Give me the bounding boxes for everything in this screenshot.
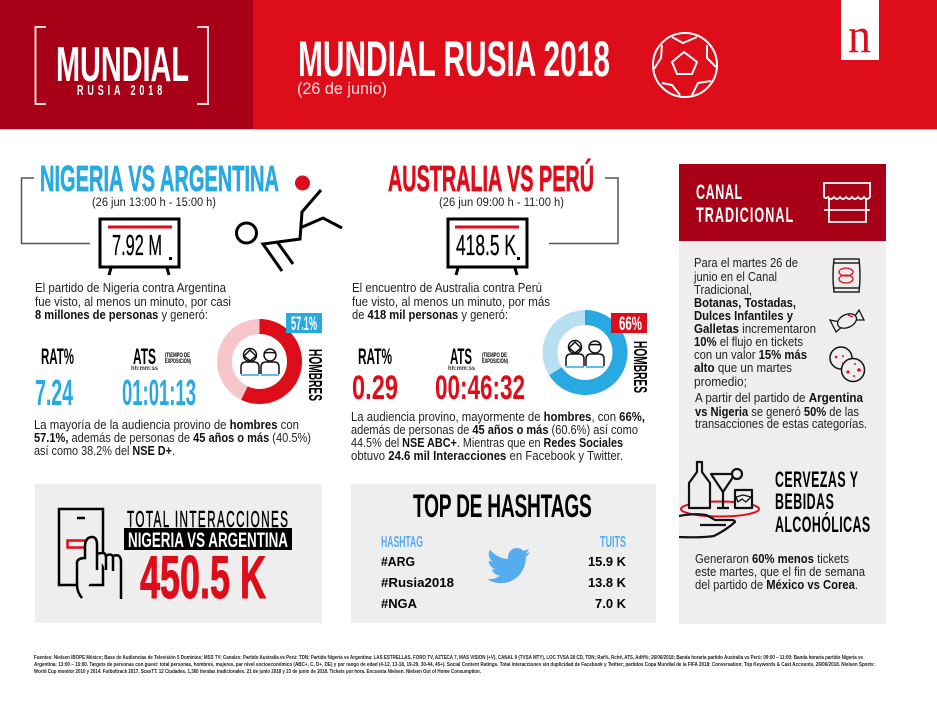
header band [0, 0, 937, 130]
panel header: TRADICIONAL [696, 203, 794, 227]
label: hombres: HOMBRES [305, 349, 325, 401]
icon: candy [830, 310, 864, 332]
table: hashtags: 7.0 K [595, 596, 627, 611]
match schedule: (26 jun 09:00 h - 11:00 h) [439, 197, 564, 209]
stat: ATS: EXPOSICIÓN) [165, 357, 191, 365]
icon: snack bag [833, 259, 860, 292]
panel: canal tradicional [679, 164, 886, 624]
donut chart: 66% hombres [550, 313, 650, 393]
connector line [549, 178, 618, 244]
heading: top de hashtags: TOP DE HASHTAGS [413, 488, 592, 524]
icon: twitter bird [487, 548, 530, 583]
badge: 66%: 66% [619, 314, 642, 335]
icon: tv with audience [448, 219, 527, 275]
intro text: de 418 mil personas y generó: [352, 308, 508, 322]
label: Nigeria vs Argentina: NIGERIA VS ARGENTINA [128, 529, 288, 552]
audience text: así como 38.2% del NSE D+. [34, 444, 175, 458]
icon: tv with audience: 418.5 K [456, 230, 516, 262]
text: botanas y dulces [693, 256, 867, 431]
audience text: 44.5% del NSE ABC+. Mientras que en Redes Sociales [351, 436, 623, 450]
table: hashtags: 15.9 K [588, 554, 627, 569]
stat: ATS: EXPOSICIÓN) [482, 357, 508, 365]
text: bebidas [695, 552, 865, 592]
footnote: sources: World Cup monitor 2010 y 2014. Futboltrack 2017. ScanTT. 12 Ciudades, 1,360 tiendas tradicionales. 21 de junio 2018 y 23 de junio de 2018. Tickets por hora. Encuesta Nielsen. Nielsen Out of Home Consumption. [34, 669, 481, 675]
icon: woman and man [566, 340, 604, 367]
stat: ATS: ATS [450, 344, 472, 369]
audience text: además de personas de 45 años o más (60.6%) así como [351, 423, 638, 437]
text: botanas y dulces: A partir del partido de Argentina [695, 391, 864, 405]
stat: ATS: ATS [133, 344, 156, 369]
badge: 57.1%: 57.1% [291, 314, 317, 335]
logo: Mundial Rusia 2018 bracket [36, 27, 208, 104]
logo: Mundial Rusia 2018 bracket: RUSIA 2018 [77, 82, 162, 99]
intro text: fue visto, al menos un minuto, por casi [35, 295, 231, 309]
connector line [22, 178, 90, 244]
match schedule: (26 jun 13:00 h - 15:00 h) [92, 197, 216, 209]
stat: ATS: (TIEMPO DE [165, 353, 190, 359]
text: botanas y dulces: vs Nigeria se generó 50% de las [695, 405, 859, 419]
audience text: obtuvo 24.6 mil Interacciones en Facebook y Twitter. [351, 449, 623, 463]
text: botanas y dulces: Galletas incrementaron [694, 322, 816, 336]
stat: ATS: hh:mm:ss [448, 365, 475, 372]
panel header: CANAL [696, 180, 743, 204]
heading: Nigeria vs Argentina: NIGERIA VS ARGENTINA [40, 158, 279, 199]
icon: cookies [830, 347, 864, 382]
donut chart: 57.1% hombres [224, 313, 325, 401]
intro text: El partido de Nigeria contra Argentina [35, 281, 226, 295]
stat: RAT%: RAT% [41, 344, 74, 369]
intro text: 8 millones de personas y generó: [35, 308, 208, 322]
audience text [34, 418, 311, 458]
number: 450.5 K: 450.5 K [140, 544, 266, 611]
stat: ATS: (TIEMPO DE [482, 353, 507, 359]
panel header [679, 164, 886, 241]
heading: cervezas y bebidas alcohólicas: BEBIDAS [775, 489, 834, 514]
logo: Mundial Rusia 2018 bracket: MUNDIAL [56, 38, 189, 92]
title [297, 31, 610, 98]
text: botanas y dulces: alto que un martes [694, 361, 792, 375]
stat: RAT%: 7.24 [35, 372, 73, 413]
icon: tv with audience [100, 219, 179, 275]
heading: Australia vs Perú: AUSTRALIA VS PERÚ [388, 157, 594, 199]
icon: player kicking ball [236, 176, 342, 271]
table: hashtags: #ARG [381, 554, 415, 569]
intro text [35, 281, 231, 322]
text: bebidas: este martes, que el fin de semana [695, 565, 865, 579]
icon: drinks on tray [679, 462, 759, 537]
table: hashtags: 13.8 K [588, 575, 627, 590]
table: hashtags: #NGA [381, 596, 418, 611]
heading: cervezas y bebidas alcohólicas: ALCOHÓLICAS [775, 511, 870, 537]
table: hashtags: #Rusia2018 [381, 575, 454, 590]
intro text: El encuentro de Australia contra Perú [352, 281, 542, 295]
table: hashtags [381, 534, 627, 611]
text: bebidas: Generaron 60% menos tickets [695, 552, 849, 566]
heading: total interacciones: TOTAL INTERACCIONES [127, 505, 288, 532]
stat: ATS: 01:01:13 [122, 372, 196, 413]
label: hombres: HOMBRES [630, 341, 650, 393]
intro text [352, 281, 550, 322]
table: hashtags: TUITS [600, 534, 626, 551]
footnote: sources [34, 655, 875, 675]
text: botanas y dulces: con un valor 15% más [694, 348, 807, 362]
label: Nigeria vs Argentina [124, 528, 292, 552]
stat: RAT% [352, 344, 398, 407]
stat: ATS: hh:mm:ss [131, 365, 158, 372]
text: botanas y dulces: transacciones de estas categorías. [695, 417, 867, 431]
stat: ATS [122, 344, 196, 413]
text: botanas y dulces: Para el martes 26 de [694, 256, 798, 270]
text: botanas y dulces: junio en el Canal [693, 270, 777, 284]
logo: Nielsen n [841, 0, 879, 63]
audience text: 57.1%, además de personas de 45 años o más (40.5%) [34, 431, 311, 445]
text: botanas y dulces: 10% el flujo en tickets [694, 335, 803, 349]
text: botanas y dulces: Dulces Infantiles y [694, 309, 793, 323]
text: botanas y dulces: promedio; [694, 375, 747, 389]
text: bebidas: del partido de México vs Corea. [695, 578, 858, 592]
icon: hand touching phone [59, 509, 121, 599]
panel: total interacciones [35, 484, 322, 623]
text: botanas y dulces: Tradicional, [694, 283, 752, 297]
panel: Nigeria vs Argentina [22, 158, 342, 458]
text: botanas y dulces: Botanas, Tostadas, [694, 296, 796, 310]
stat: RAT% [35, 344, 74, 413]
stat: RAT%: RAT% [358, 344, 392, 369]
title: (26 de junio) [297, 79, 387, 98]
audience text: La mayoría de la audiencia provino de hombres con [34, 418, 299, 432]
icon: soccer ball [653, 33, 717, 97]
title: MUNDIAL RUSIA 2018 [298, 31, 610, 87]
intro text: fue visto, al menos un minuto, por más [352, 295, 550, 309]
table: hashtags: HASHTAG [381, 534, 423, 551]
panel: Australia vs Perú [351, 157, 650, 463]
logo: Nielsen n: n [848, 7, 871, 63]
stat: ATS [435, 344, 525, 407]
stat: ATS: 00:46:32 [435, 369, 525, 407]
audience text [351, 410, 645, 463]
stat: RAT%: 0.29 [352, 369, 398, 407]
icon: woman and man [241, 348, 279, 375]
heading: cervezas y bebidas alcohólicas: CERVEZAS Y [775, 467, 858, 492]
panel: top de hashtags [351, 484, 656, 623]
icon: market stall [824, 183, 870, 222]
icon: tv with audience: 7.92 M [112, 230, 162, 262]
heading: cervezas y bebidas alcohólicas [775, 467, 870, 537]
audience text: La audiencia provino, mayormente de hombres, con 66%, [351, 410, 645, 424]
